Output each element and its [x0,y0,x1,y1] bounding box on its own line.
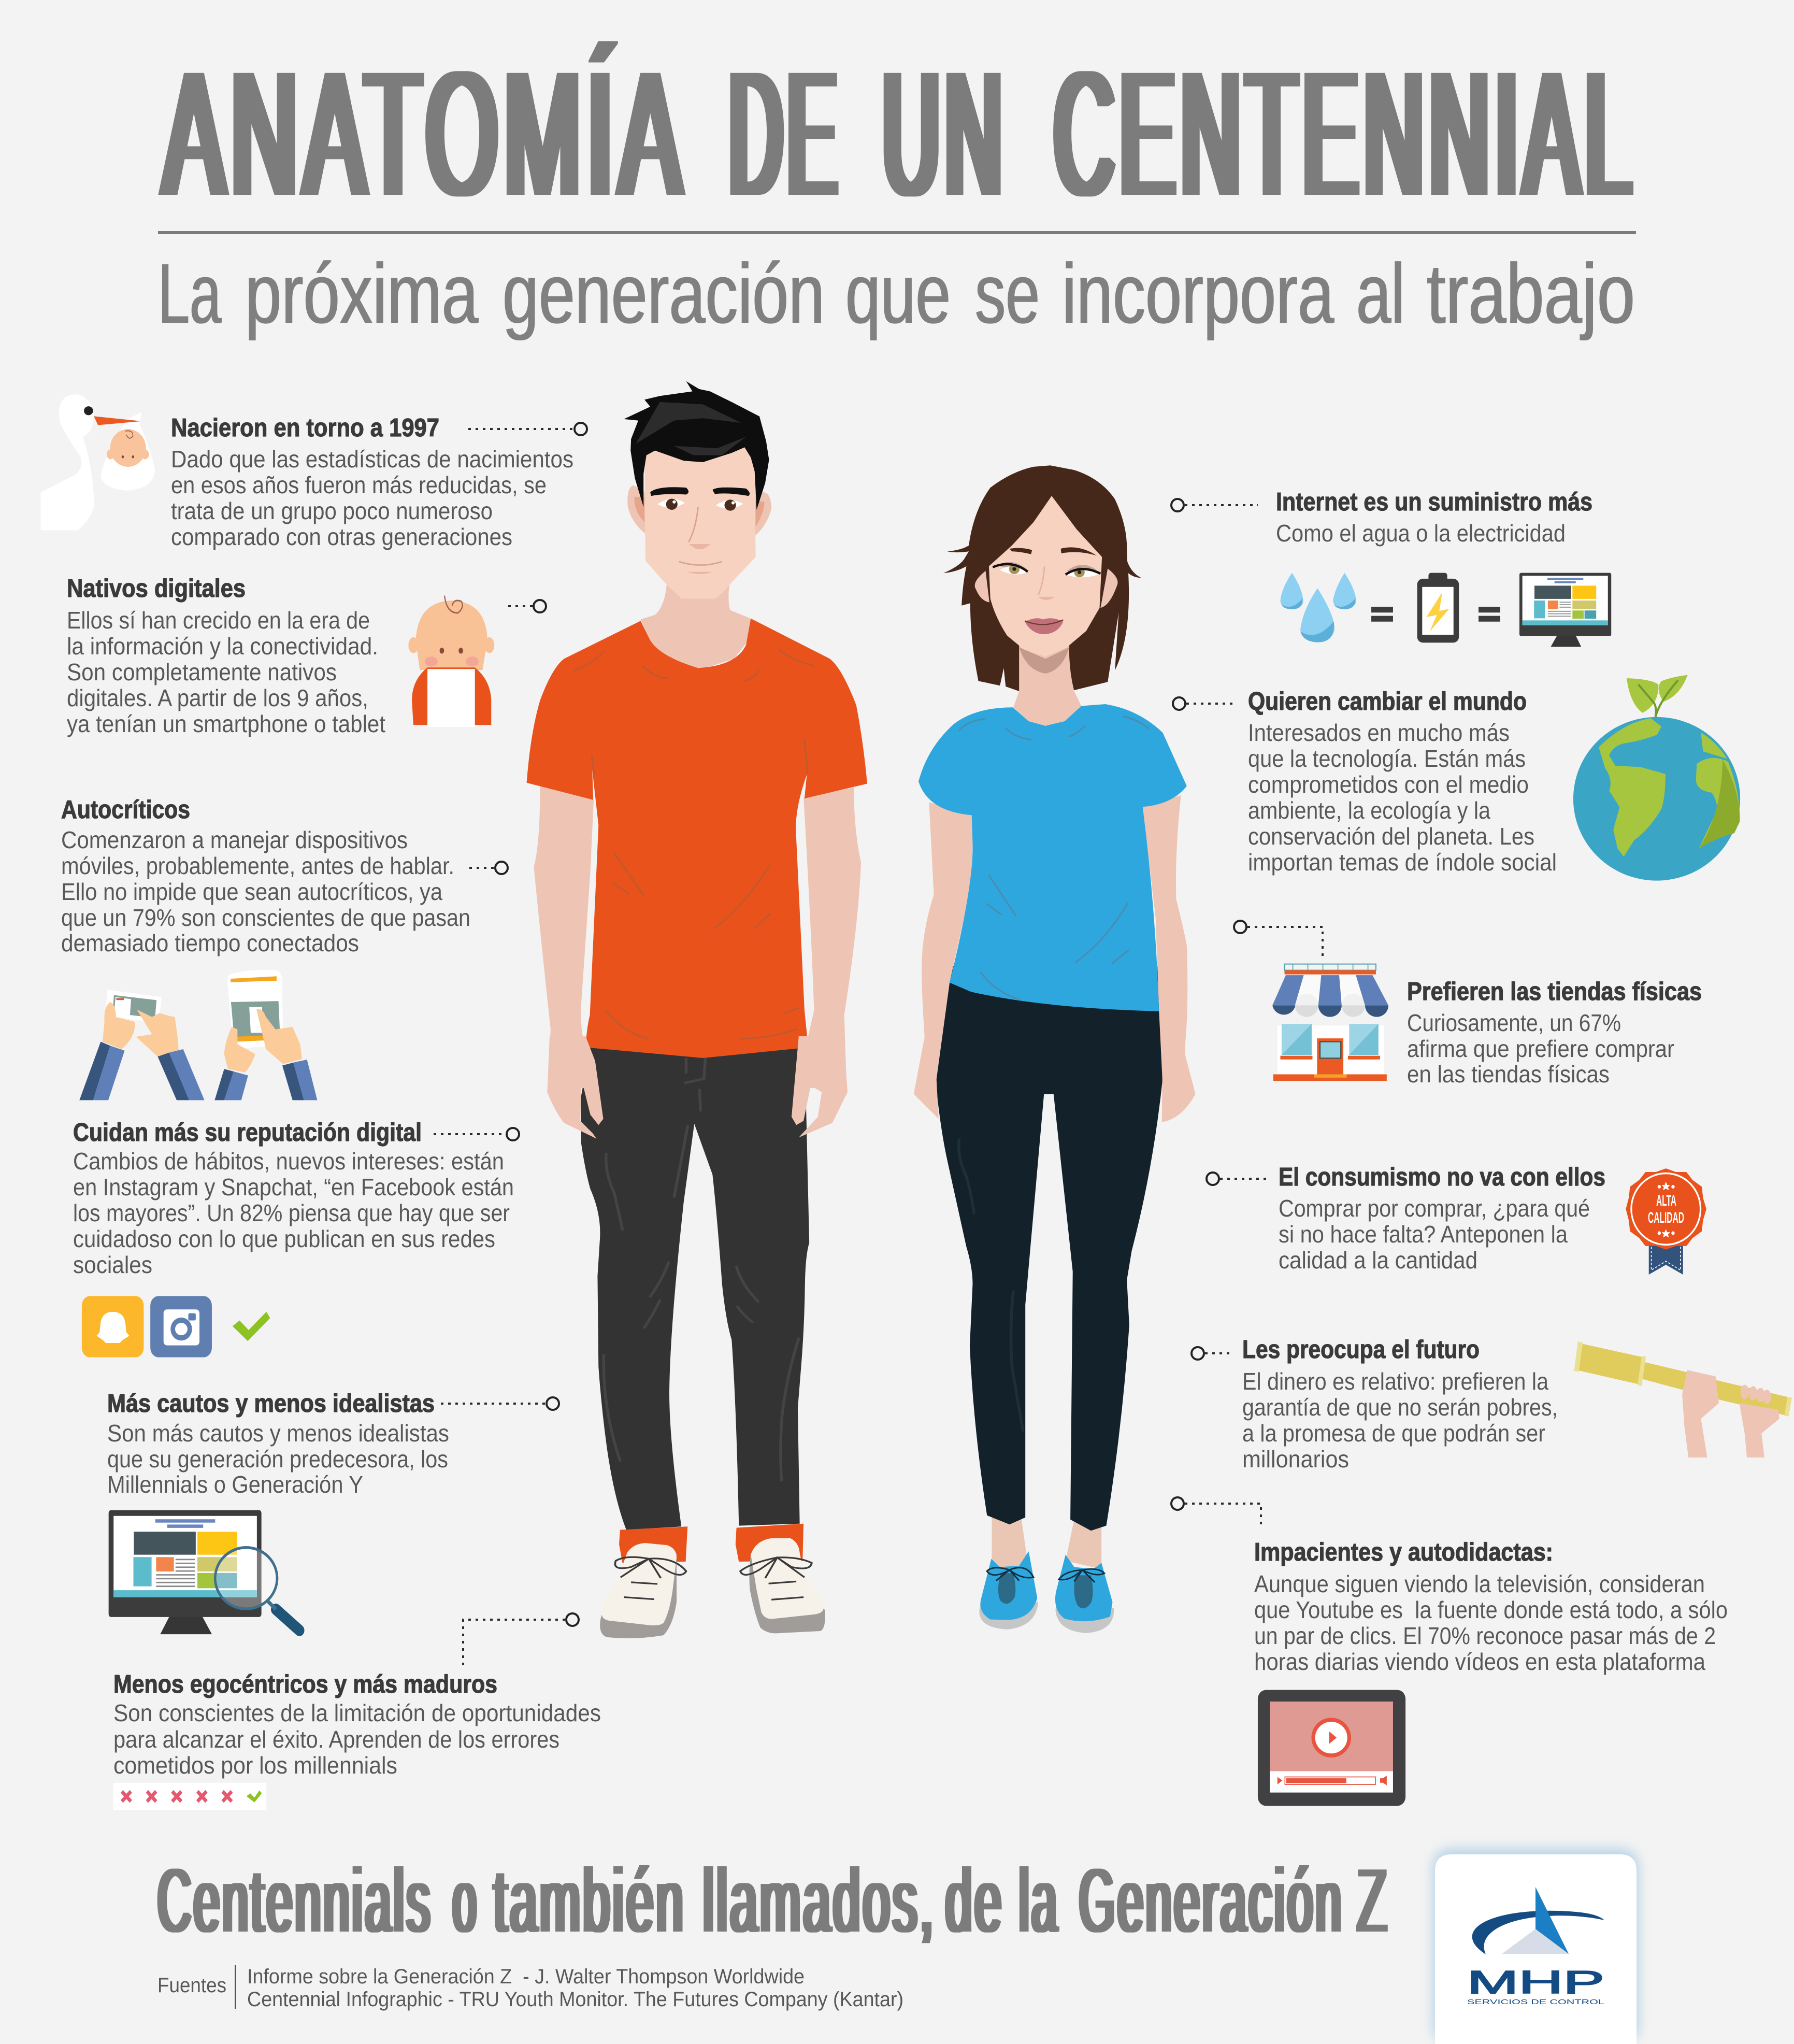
icon: hands using tablets [79,970,317,1100]
connector: Autocríticos [469,862,508,874]
text block: Dado que las estadísticas de nacimientos [171,446,573,473]
text block: comparado con otras generaciones [171,523,512,550]
subtitle: La [158,246,222,341]
man: head [624,381,771,598]
woman: blue t-shirt [918,704,1187,1011]
heading: Internet es un suministro más [1276,488,1592,516]
panel: Nacieron en torno a 1997 [40,394,573,550]
footer heading: llamados, [703,1850,936,1951]
logo mark [1472,1887,1604,1954]
icon: crosses and check row [113,1783,266,1810]
subtitle: incorpora [1062,246,1334,341]
text block [73,1148,514,1278]
connector: Cuidan [434,1128,519,1140]
icon: monitor with magnifying glass [109,1510,299,1634]
heading: Cuidan más su reputación digital [73,1119,422,1147]
heading: Autocríticos [61,796,190,824]
text block: en las tiendas físicas [1407,1061,1610,1088]
text block: si no hace falta? Anteponen la [1279,1221,1568,1248]
text block [1279,1195,1590,1274]
figure: man [527,381,867,1638]
connector: Nativos digitales [508,600,546,612]
text block: para alcanzar el éxito. Aprenden de los errores [113,1726,559,1753]
title: UN [883,35,1008,233]
subtitle: al [1356,246,1405,341]
figure: woman [914,465,1195,1633]
text block: afirma que prefiere comprar [1407,1035,1674,1062]
connector: Prefieren [1234,921,1323,958]
heading: Prefieren las tiendas físicas [1407,978,1702,1006]
panel: El consumismo no va con ellos [1279,1163,1706,1275]
text block: Comenzaron a manejar dispositivos [61,826,408,853]
icon: quality badge: CALIDAD [1648,1209,1684,1226]
man: trousers [581,1045,809,1530]
connector: Consumismo [1207,1173,1269,1185]
heading: Más cautos y menos idealistas [107,1390,435,1418]
text block: en Instagram y Snapchat, “en Facebook están [73,1174,514,1200]
footer heading [157,1850,1389,1951]
subtitle [158,246,1635,341]
text block: Son completamente nativos [67,659,337,685]
panel: Cuidan más su reputación digital [73,1119,514,1357]
heading: Impacientes y autodidactas: [1254,1538,1553,1566]
text block: ya tenían un smartphone o tablet [67,710,385,737]
text block: millonarios [1242,1446,1349,1473]
text block: comprometidos con el medio [1248,771,1529,798]
text block: Cambios de hábitos, nuevos intereses: están [73,1148,504,1175]
text block: que la tecnología. Están más [1248,745,1526,772]
text block: Como el agua o la electricidad [1276,520,1566,547]
text block: sociales [73,1251,152,1278]
woman: leggings [935,966,1163,1569]
text block: calidad a la cantidad [1279,1247,1477,1274]
connector: Impacientes [1171,1497,1261,1524]
icon: store [1272,964,1388,1081]
text block [1248,719,1557,876]
heading: Les preocupa el futuro [1242,1336,1480,1364]
text block: horas diarias viendo vídeos en esta plataforma [1254,1648,1705,1675]
footer heading: o [453,1850,479,1951]
panel: Menos egocéntricos y más maduros [113,1670,601,1810]
footer heading: la [1019,1850,1059,1951]
heading: Menos egocéntricos y más maduros [113,1670,497,1698]
text block: conservación del planeta. Les [1248,823,1534,850]
panel: Les preocupa el futuro [1242,1336,1792,1473]
icon: earth with leaves [1573,675,1740,881]
text block: que Youtube es la fuente donde está todo, a sólo [1254,1596,1728,1623]
panel: Prefieren las tiendas físicas [1272,964,1702,1088]
man: orange t-shirt [527,619,867,1058]
connector: Quieren [1173,697,1236,710]
title: ANATOMÍA [163,35,687,233]
subtitle: generación [503,246,825,341]
title rule [158,231,1636,234]
panel: Más cautos y menos idealistas [107,1390,449,1634]
text block: digitales. A partir de los 9 años, [67,684,368,711]
connector: Más cautos [441,1397,559,1410]
text block: Ello no impide que sean autocríticos, ya [61,878,442,905]
icon: stork with baby [40,394,155,530]
connector: Futuro [1192,1347,1231,1360]
panel: Nativos digitales [67,575,494,737]
heading: El consumismo no va con ellos [1279,1163,1605,1191]
title [163,35,1637,233]
text block: Comprar por comprar, ¿para qué [1279,1195,1590,1222]
text block: Millennials o Generación Y [107,1471,363,1498]
connector: Menos egocéntricos [463,1613,579,1665]
connector: Internet [1171,499,1258,511]
logo card [1433,1849,1639,2044]
panel: Autocríticos [61,796,470,1100]
text block: importan temas de índole social [1248,849,1557,876]
text block: trata de un grupo poco numeroso [171,497,493,524]
text block: Son conscientes de la limitación de oportunidades [113,1699,601,1726]
logo name: MHP [1467,1965,1604,2000]
icon: video tablet [1258,1690,1405,1806]
subtitle: trabajo [1427,246,1635,341]
text block [113,1699,601,1779]
heading: Nacieron en torno a 1997 [171,414,439,442]
text block [1254,1570,1728,1675]
icon: water = battery = internet [1280,573,1611,647]
subtitle: que [845,246,951,341]
panel: Impacientes y autodidactas [1254,1538,1728,1806]
heading: Quieren cambiar el mundo [1248,688,1527,716]
text block [1242,1368,1558,1473]
title: DE [729,35,842,233]
sources: Centennial Infographic - TRU Youth Monitor. The Futures Company (Kantar) [247,1988,903,2011]
text block: la información y la conectividad. [67,633,378,660]
text block [67,607,385,737]
woman: neck and hair [943,465,1141,726]
icon: snapchat, instagram and check [82,1296,270,1357]
text block: los mayores”. Un 82% piensa que hay que ser [73,1199,510,1226]
heading: Nativos digitales [67,575,246,603]
woman: hands [914,1036,1195,1122]
connector: Nacieron [468,423,587,435]
text block: en esos años fueron más reducidas, se [171,471,547,498]
text block: garantía de que no serán pobres, [1242,1394,1558,1421]
text block [1407,1009,1674,1088]
text block: El dinero es relativo: prefieren la [1242,1368,1548,1395]
text block: Son más cautos y menos idealistas [107,1420,449,1447]
footer heading: Z [1357,1850,1389,1951]
man: arms and neck [534,580,861,1088]
text block [61,826,470,956]
icon: quality badge: ALTA [1656,1192,1676,1209]
footer heading: también [494,1850,686,1951]
footer heading: de [945,1850,1004,1951]
footer heading: Centennials [157,1850,433,1951]
sources: Fuentes [157,1974,226,1997]
man: hands [547,1036,848,1139]
text block: móviles, probablemente, antes de hablar. [61,852,454,879]
icon: baby [408,596,494,727]
text block: cuidadoso con lo que publican en sus redes [73,1225,495,1252]
text block [107,1420,449,1498]
woman: shoes [979,1551,1114,1633]
text block: Curiosamente, un 67% [1407,1009,1621,1036]
subtitle: próxima [245,246,479,341]
text block: Interesados en mucho más [1248,719,1510,746]
text block: Ellos sí han crecido en la era de [67,607,370,634]
text block: ambiente, la ecología y la [1248,797,1490,824]
text block: a la promesa de que podrán ser [1242,1420,1545,1447]
footer heading: Generación [1079,1850,1344,1951]
text block [171,446,573,550]
man: shoes [600,1524,825,1638]
icon: hands holding telescope [1574,1341,1792,1457]
subtitle: se [975,246,1040,341]
logo tagline: SERVICIOS DE CONTROL [1467,1998,1604,2006]
sources: Informe sobre la Generación Z - J. Walter Thompson Worldwide [247,1965,805,1988]
icon: quality badge [1626,1168,1706,1275]
text block: demasiado tiempo conectados [61,930,359,956]
woman: face [975,496,1118,656]
text block: que un 79% son conscientes de que pasan [61,904,470,931]
text block: cometidos por los millennials [113,1752,397,1779]
panel: Internet es un suministro más [1276,488,1611,647]
panel: Quieren cambiar el mundo [1248,675,1740,881]
sources [157,1965,903,2011]
text block: Aunque siguen viendo la televisión, consideran [1254,1570,1705,1597]
text block: que su generación predecesora, los [107,1446,448,1473]
text block: un par de clics. El 70% reconoce pasar más de 2 [1254,1622,1716,1649]
woman: arms [915,795,1194,1088]
